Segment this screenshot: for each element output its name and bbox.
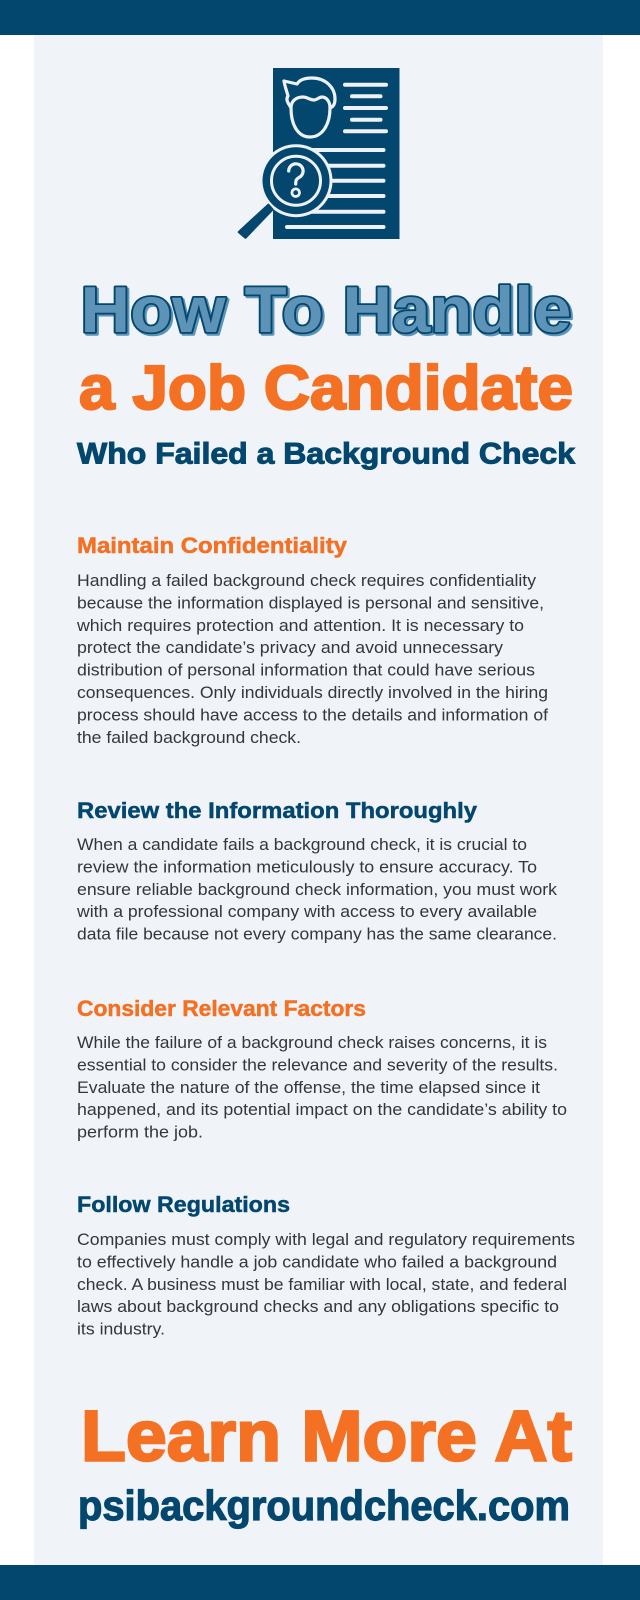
call to action: Learn More At: Learn More At	[81, 1398, 572, 1476]
icon: resume under magnifying glass	[239, 68, 400, 239]
title: Who Failed a Background Check: Who Failed a Background Check	[77, 438, 575, 470]
text block: regulations body: its industry.	[77, 1321, 165, 1339]
text block: factors body	[77, 1034, 567, 1142]
section: Follow Regulations	[77, 1192, 575, 1339]
text block: regulations body: to effectively handle a job candidate who failed a background	[77, 1253, 557, 1271]
text block: review body: When a candidate fails a background check, it is crucial to	[77, 836, 527, 854]
text block: factors body: essential to consider the relevance and severity of the results.	[77, 1056, 558, 1074]
section: Review the Information Thoroughly	[76, 798, 558, 944]
text block: regulations body	[77, 1231, 575, 1339]
text block: confidentiality body: Handling a failed background check requires confidentiality	[77, 572, 537, 590]
text block: review body: data file because not every company has the same clearance.	[77, 926, 557, 944]
section: Consider Relevant Factors	[77, 996, 567, 1142]
text block: confidentiality body: distribution of personal information that could have serious	[77, 662, 535, 680]
text block: review body: ensure reliable background check information, you must work	[77, 881, 558, 899]
text block: review body: with a professional company with access to every available	[76, 903, 537, 921]
website: psibackgroundcheck.com: psibackgroundcheck.com	[78, 1482, 570, 1529]
text block: regulations body: Companies must comply with legal and regulatory requirements	[77, 1231, 575, 1249]
text block: review body	[76, 836, 558, 944]
text block: confidentiality body: because the information displayed is personal and sensitive,	[77, 594, 544, 612]
top band	[0, 0, 640, 35]
title: How To Handle: How To Handle	[80, 273, 572, 346]
heading: Consider Relevant Factors: Consider Relevant Factors	[77, 996, 366, 1021]
text block: confidentiality body: protect the candidate’s privacy and avoid unnecessary	[77, 639, 504, 657]
text block: confidentiality body: consequences. Only individuals directly involved in the hiring	[77, 684, 548, 702]
text block: confidentiality body: process should have access to the details and information of	[77, 706, 548, 724]
text block: regulations body: check. A business must be familiar with local, state, and federal	[77, 1276, 567, 1294]
text block: confidentiality body: the failed background check.	[77, 729, 301, 747]
text block: confidentiality body: which requires protection and attention. It is necessary to	[76, 617, 524, 635]
text block: review body: review the information meticulously to ensure accuracy. To	[77, 858, 537, 876]
title: a Job Candidate: a Job Candidate	[79, 354, 573, 423]
heading: Review the Information Thoroughly: Review the Information Thoroughly	[77, 798, 478, 823]
text block: factors body: perform the job.	[77, 1124, 203, 1142]
text block: factors body: Evaluate the nature of the offense, the time elapsed since it	[77, 1079, 540, 1097]
text block: factors body: While the failure of a background check raises concerns, it is	[77, 1034, 547, 1052]
text block: regulations body: laws about background checks and any obligations specific to	[77, 1298, 559, 1316]
text block: confidentiality body	[76, 572, 548, 747]
text block: factors body: happened, and its potential impact on the candidate’s ability to	[77, 1101, 567, 1119]
section: Maintain Confidentiality	[76, 533, 548, 747]
bottom band	[0, 1565, 640, 1600]
heading: Maintain Confidentiality: Maintain Confidentiality	[77, 533, 348, 558]
heading: Follow Regulations: Follow Regulations	[77, 1192, 290, 1217]
